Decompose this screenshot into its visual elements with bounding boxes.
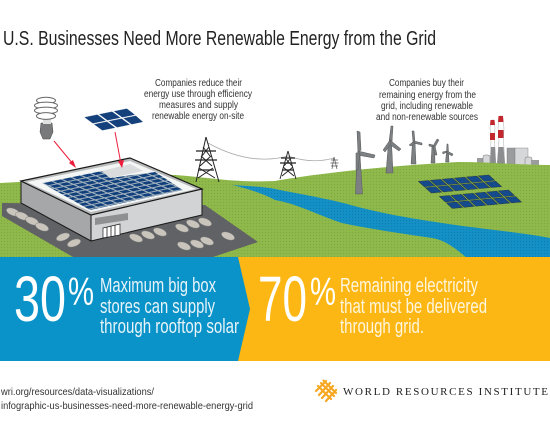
text block: 70% description: that must be delivered <box>340 296 487 318</box>
title: U.S. Businesses Need More Renewable Energy from the Grid <box>3 28 436 50</box>
text block: grid purchase note: grid, including renewable <box>381 101 473 112</box>
stat: 30%: 30 <box>14 263 66 335</box>
parked cars <box>5 206 236 252</box>
text block: 30% description <box>100 275 239 338</box>
text block: on-site efficiency note: renewable energy on-site <box>152 111 244 122</box>
source url <box>0 386 253 412</box>
text block: on-site efficiency note: Companies reduce their <box>155 78 243 89</box>
panel: 70% yellow banner <box>238 257 550 361</box>
logo wordmark: WORLD RESOURCES INSTITUTE <box>343 386 548 398</box>
text block: 70% description: through grid. <box>340 316 424 338</box>
stat: 70%: % <box>310 271 336 314</box>
stat: 30%: % <box>68 271 94 314</box>
power plant <box>477 116 539 166</box>
power line wire <box>208 143 334 161</box>
icon: light bulb <box>34 97 58 139</box>
text block: grid purchase note: and non-renewable sources <box>376 112 478 123</box>
arrow: panel to roof <box>115 132 124 168</box>
icon: floating solar panel <box>83 108 143 131</box>
icon: WRI logo <box>316 380 336 401</box>
text block: 30% description: stores can supply <box>100 296 215 318</box>
stat: 70%: 70 <box>258 263 307 335</box>
text block: 30% description: through rooftop solar <box>100 316 239 338</box>
source url: infographic-us-businesses-need-more-renewable-energy-grid <box>1 400 253 412</box>
arrow: bulb to roof <box>54 141 76 168</box>
store sign <box>95 213 128 225</box>
river <box>232 185 550 258</box>
transmission towers <box>195 137 338 182</box>
text block: grid purchase note <box>376 78 478 123</box>
text block: grid purchase note: Companies buy their <box>389 78 465 89</box>
parking lot <box>2 203 258 257</box>
text block: on-site efficiency note <box>144 78 252 122</box>
loading doors <box>103 224 120 238</box>
big box store building <box>21 158 202 241</box>
rooftop solar panels <box>42 171 183 210</box>
vacant roof patch <box>102 164 143 178</box>
green hills <box>0 162 550 258</box>
wind turbines <box>356 126 453 194</box>
text block: 70% description <box>340 275 487 338</box>
text block: 70% description: Remaining electricity <box>340 275 478 297</box>
text block: on-site efficiency note: measures and supply <box>159 100 238 111</box>
source url: wri.org/resources/data-visualizations/ <box>0 386 154 398</box>
text block: on-site efficiency note: energy use through efficiency <box>144 89 252 100</box>
text block: 30% description: Maximum big box <box>100 275 216 297</box>
text block: grid purchase note: remaining energy from the <box>379 90 476 101</box>
solar field <box>417 174 523 209</box>
panel: 30% blue banner <box>0 257 250 361</box>
